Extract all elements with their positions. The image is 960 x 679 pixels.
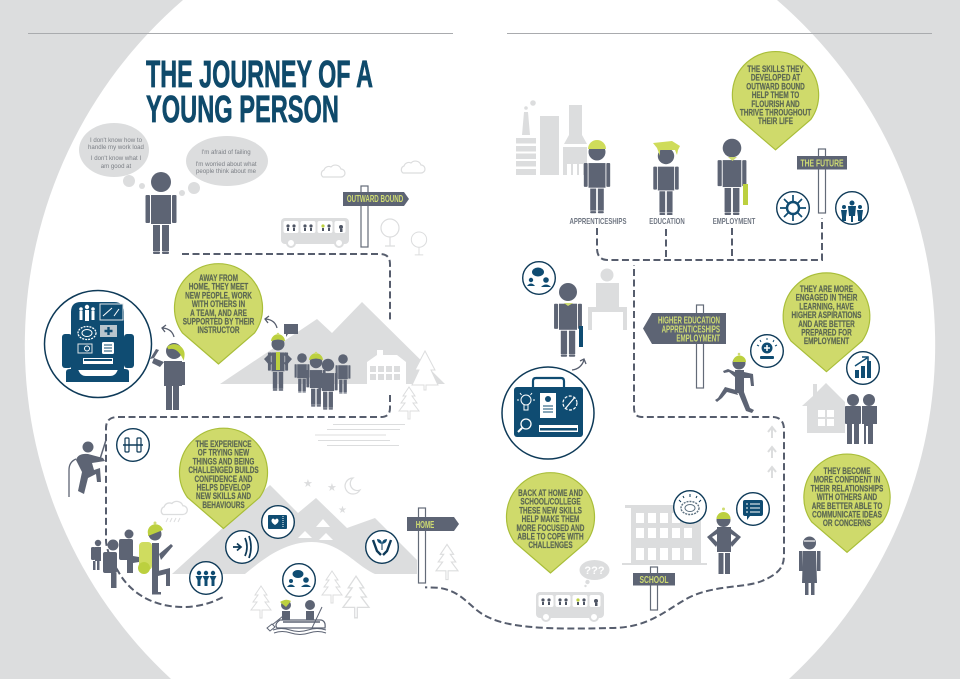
person: employment xyxy=(718,139,748,215)
thought text: am good at xyxy=(101,163,132,170)
backpack: brain xyxy=(78,326,96,340)
person with case xyxy=(554,283,583,357)
balloon: the experience: BEHAVIOURS xyxy=(202,500,245,510)
speech bubble xyxy=(284,324,298,337)
icon: brain xyxy=(674,491,706,523)
icon: arrows through lines xyxy=(226,531,258,563)
trees by river xyxy=(251,544,458,618)
thought text: I'm afraid of failing xyxy=(201,149,251,156)
signpost: home xyxy=(407,508,459,583)
balloon: more engaged: HIGHER ASPIRATIONS xyxy=(792,310,862,320)
arrow xyxy=(265,316,277,328)
balloon: skills they developed: OUTWARD BOUND xyxy=(746,81,805,92)
trees near lodge xyxy=(399,351,438,419)
signpost: higher education: EMPLOYMENT xyxy=(676,332,720,344)
icon: hands with plant xyxy=(366,531,398,563)
person: apprenticeship xyxy=(584,140,610,213)
instructor xyxy=(264,333,292,391)
stars and moon: ★ xyxy=(338,505,347,516)
icon: growth chart xyxy=(847,352,879,384)
person: worried young person xyxy=(146,172,176,254)
mountains: outward bound centre xyxy=(220,302,445,384)
toolkit: magnifier xyxy=(518,419,531,432)
thought text: I'm worried about what xyxy=(195,161,257,168)
balloon: away from home: INSTRUCTOR xyxy=(198,325,240,336)
arrow xyxy=(572,359,586,370)
balloon: back at home: THESE NEW SKILLS xyxy=(519,505,582,516)
balloon: the experience: CONFIDENCE AND xyxy=(195,474,253,484)
clouds and trees near sign xyxy=(321,161,427,255)
balloon: skills they developed xyxy=(732,52,819,150)
balloon: more confident: COMMUNICATE IDEAS xyxy=(812,509,882,520)
balloon: away from home: NEW PEOPLE, WORK xyxy=(185,290,252,301)
balloon: more confident: OR CONCERNS xyxy=(823,518,872,529)
toolkit: bulb xyxy=(517,393,535,410)
signpost: the future xyxy=(797,149,847,213)
school building xyxy=(622,505,707,565)
balloon: more engaged: PREPARED FOR xyxy=(801,327,852,338)
toolkit: gear and wrench xyxy=(563,396,577,410)
rain cloud xyxy=(161,501,187,522)
labels: APPRENTICESHIPS xyxy=(570,216,627,226)
climber xyxy=(69,440,106,497)
signpost: outward bound: OUTWARD BOUND xyxy=(347,192,403,204)
main hiker xyxy=(138,522,173,594)
balloon: away from home: HOME, THEY MEET xyxy=(189,281,248,292)
balloon: more confident: ARE BETTER ABLE TO xyxy=(812,501,882,511)
stars and moon: ★ xyxy=(327,482,337,494)
icon: radiating network xyxy=(777,192,809,224)
couple xyxy=(845,394,877,444)
balloon: the experience: OF TRYING NEW xyxy=(198,447,249,458)
balloon: the experience xyxy=(180,428,268,528)
signpost: higher education xyxy=(643,305,726,388)
balloon: more engaged: THEY ARE MORE xyxy=(800,284,854,294)
icon: dumbbell xyxy=(117,429,149,461)
icon: notebook with heart xyxy=(262,506,294,538)
backpack: map xyxy=(100,304,123,320)
balloon: more confident: THEIR RELATIONSHIPS xyxy=(811,483,884,494)
balloon: more engaged: LEARNING, HAVE xyxy=(799,301,854,312)
weather lines xyxy=(315,424,405,446)
title: YOUNG PERSON xyxy=(146,89,339,131)
balloon: skills they developed: DEVELOPED AT xyxy=(751,72,800,83)
balloon: more engaged: ENGAGED IN THEIR xyxy=(796,292,857,303)
balloon: back at home: CHALLENGES xyxy=(528,540,573,551)
group of young people xyxy=(295,352,350,410)
arrow xyxy=(162,325,174,337)
balloon: away from home: SUPPORTED BY THEIR xyxy=(183,316,254,327)
thought text: handle my work load xyxy=(88,144,144,151)
bus xyxy=(281,218,349,247)
person with hat looking up xyxy=(150,343,185,410)
signpost: school xyxy=(633,567,675,610)
signpost: higher education: APPRENTICESHIPS xyxy=(662,323,720,335)
thought text: I don't know what I xyxy=(91,155,141,162)
house xyxy=(802,383,845,433)
balloon: back at home: BACK AT HOME AND xyxy=(518,488,583,498)
thought cloud: ??? xyxy=(584,565,605,577)
balloon: the experience: THE EXPERIENCE xyxy=(195,439,252,449)
mountains: night scene xyxy=(172,485,425,640)
icon: team xyxy=(190,562,222,594)
thought cloud xyxy=(580,560,610,587)
icon: toolkit xyxy=(502,367,594,459)
stars and moon: ★ xyxy=(303,478,313,490)
balloon: skills they developed: THRIVE THROUGHOUT xyxy=(740,107,811,118)
balloon: away from home xyxy=(174,264,262,364)
backpack: ruler xyxy=(83,358,113,364)
signpost: higher education: HIGHER EDUCATION xyxy=(658,314,720,326)
lodge building xyxy=(367,350,406,384)
balloon: back at home xyxy=(506,473,594,573)
labels: EMPLOYMENT xyxy=(713,216,756,226)
backpack: camera xyxy=(78,344,92,353)
balloon: skills they developed: FLOURISH AND xyxy=(751,99,800,109)
balloon: more engaged xyxy=(783,273,870,372)
person: education xyxy=(653,141,680,215)
balloon: the experience: CHALLENGED BUILDS xyxy=(188,465,259,475)
balloon: more engaged: EMPLOYMENT xyxy=(804,336,849,347)
balloon: back at home: HELP MAKE THEM xyxy=(522,514,579,524)
backpack: people xyxy=(79,305,95,321)
balloon: away from home: WITH OTHERS IN xyxy=(192,299,245,309)
icon: checklist xyxy=(737,493,769,525)
signpost: school: SCHOOL xyxy=(639,574,669,585)
balloon: away from home: A TEAM, AND ARE xyxy=(190,308,247,318)
balloon: more confident: THEY BECOME xyxy=(824,466,871,476)
balloon: more confident: MORE CONFIDENT IN xyxy=(814,474,880,485)
icon: discussion xyxy=(523,262,555,294)
up arrows xyxy=(768,427,776,478)
seated person at desk xyxy=(588,268,627,330)
balloon: back at home: SCHOOL/COLLEGE xyxy=(520,496,581,507)
balloon: the experience: HELPS DEVELOP xyxy=(197,482,251,493)
hiking group xyxy=(91,530,139,588)
balloon: back at home: ABLE TO COPE WITH xyxy=(517,531,584,542)
balloon: the experience: NEW SKILLS AND xyxy=(196,491,251,502)
toolkit: ruler xyxy=(539,425,578,432)
thought text: I don't know how to xyxy=(90,137,143,144)
labels xyxy=(570,216,756,226)
signpost: outward bound xyxy=(343,186,409,247)
runner xyxy=(715,353,754,413)
backpack: list xyxy=(102,342,114,354)
balloon: skills they developed: THE SKILLS THEY xyxy=(747,64,804,74)
backpack icon xyxy=(44,290,152,398)
title xyxy=(146,54,373,131)
older person with glasses xyxy=(799,536,820,595)
stars and moon xyxy=(303,478,360,516)
backpack: first aid xyxy=(100,325,117,337)
bus xyxy=(536,592,604,621)
factory xyxy=(516,100,587,175)
toolkit: certificate xyxy=(540,393,556,418)
title: THE JOURNEY OF A xyxy=(146,54,373,96)
dashed journey path xyxy=(106,218,822,629)
balloon: more confident xyxy=(804,454,890,552)
balloon: the experience: THINGS AND BEING xyxy=(193,456,254,467)
thought text xyxy=(88,137,257,175)
signpost: the future: THE FUTURE xyxy=(800,157,844,169)
raft xyxy=(267,600,326,634)
labels: EDUCATION xyxy=(649,216,685,226)
signpost: home: HOME xyxy=(416,518,435,530)
balloon: skills they developed: HELP THEM TO xyxy=(752,90,799,100)
balloon: away from home: AWAY FROM xyxy=(199,273,238,283)
icon: discussion xyxy=(283,564,315,596)
balloon: skills they developed: THEIR LIFE xyxy=(758,116,793,127)
thought text: people think about me xyxy=(196,168,257,175)
balloon: more confident: WITH OTHERS AND xyxy=(817,492,877,502)
top rules xyxy=(28,32,932,34)
icon: head plus idea xyxy=(751,335,783,367)
balloon: back at home: MORE FOCUSED AND xyxy=(517,523,585,533)
thought bubbles xyxy=(79,123,268,196)
person with hands on hips xyxy=(707,508,741,574)
balloon: more engaged: AND ARE BETTER xyxy=(798,319,855,329)
icon: leader and team xyxy=(836,192,868,224)
